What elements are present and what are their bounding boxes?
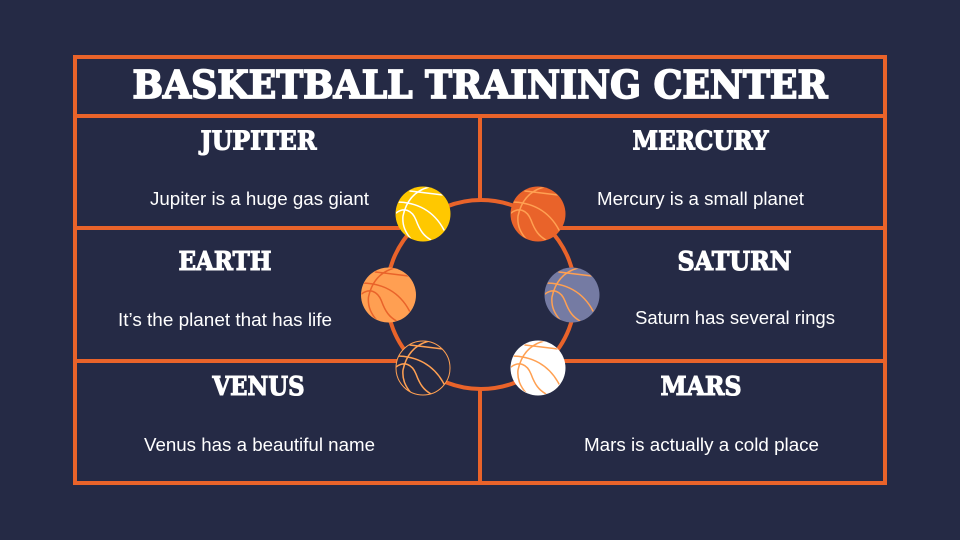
Venus text: Venus has a beautiful name <box>144 435 375 455</box>
Mars heading: MARS <box>660 372 742 402</box>
panel: Saturn <box>635 247 835 328</box>
panel: Earth <box>118 247 332 330</box>
Mercury heading: MERCURY <box>632 126 769 156</box>
icon: Jupiter basketball <box>396 186 450 242</box>
icon: Saturn basketball <box>544 268 600 322</box>
Earth heading: EARTH <box>178 247 272 277</box>
panel: Mars <box>584 372 819 455</box>
icon: Mars basketball <box>510 340 566 396</box>
icon: Venus basketball <box>396 341 450 395</box>
Venus heading: VENUS <box>212 372 304 402</box>
Mercury text: Mercury is a small planet <box>597 189 804 209</box>
title: BASKETBALL TRAINING CENTER <box>132 62 828 107</box>
Jupiter heading: JUPITER <box>199 126 317 156</box>
Jupiter text: Jupiter is a huge gas giant <box>150 189 369 209</box>
Earth text: It’s the planet that has life <box>118 310 332 330</box>
icon: Mercury basketball <box>510 186 566 242</box>
icon: Earth basketball <box>361 268 416 322</box>
Mars text: Mars is actually a cold place <box>584 435 819 455</box>
court lines <box>75 57 885 483</box>
Saturn heading: SATURN <box>678 247 792 277</box>
panel: Venus <box>144 372 375 455</box>
panel: Mercury <box>597 126 804 209</box>
infographic canvas <box>73 55 887 485</box>
Saturn text: Saturn has several rings <box>635 308 835 328</box>
panel: Jupiter <box>150 126 369 209</box>
